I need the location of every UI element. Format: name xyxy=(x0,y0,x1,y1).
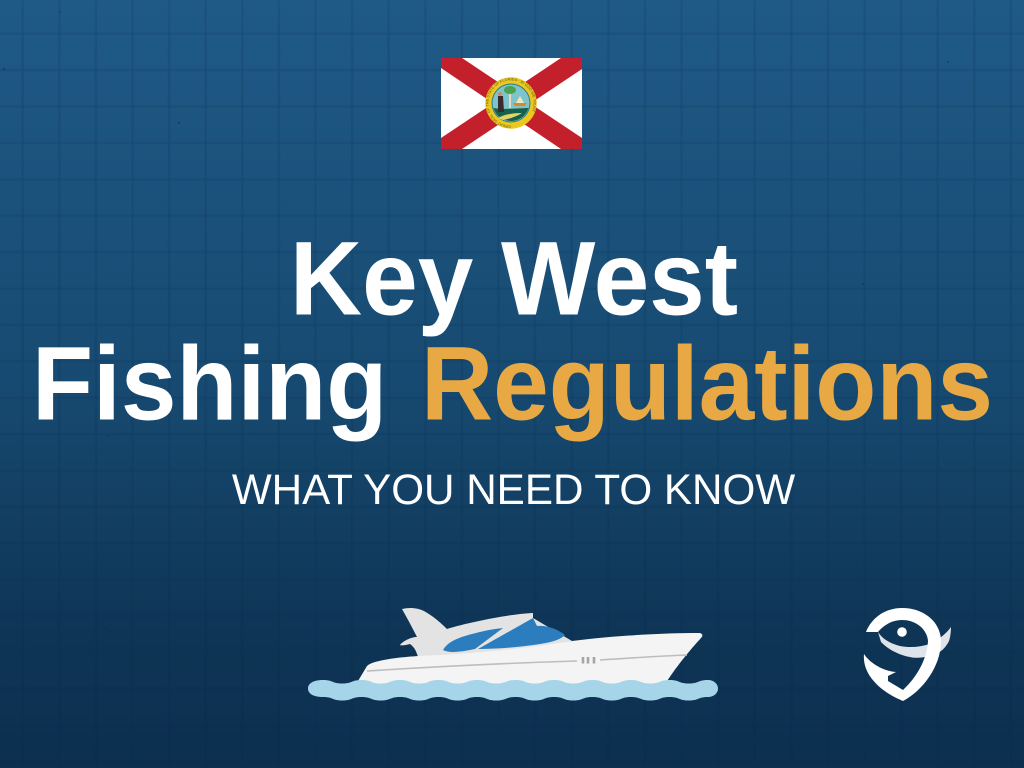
title line: Key West: Key West xyxy=(290,219,738,337)
fish hook body xyxy=(864,608,941,701)
boat windows xyxy=(443,628,503,652)
fish tail band xyxy=(878,627,951,658)
subtitle: WHAT YOU NEED TO KNOW xyxy=(232,466,795,513)
hull stripe xyxy=(367,655,687,671)
hull vents xyxy=(583,657,594,664)
icon: fish and hook logo xyxy=(864,608,951,701)
illustration: boat on water xyxy=(308,608,718,700)
title xyxy=(32,219,993,442)
title line: Fishing: Fishing xyxy=(32,324,387,442)
boat hull xyxy=(355,633,702,686)
icon: Florida flag: GREAT SEAL OF THE STATE OF FLORIDA · IN GOD WE TRUST xyxy=(486,78,536,128)
fish eye xyxy=(897,627,907,637)
icon: Florida flag xyxy=(441,58,582,149)
water waves xyxy=(308,680,718,700)
title line: Regulations: Regulations xyxy=(421,324,993,442)
boat superstructure xyxy=(400,608,572,657)
